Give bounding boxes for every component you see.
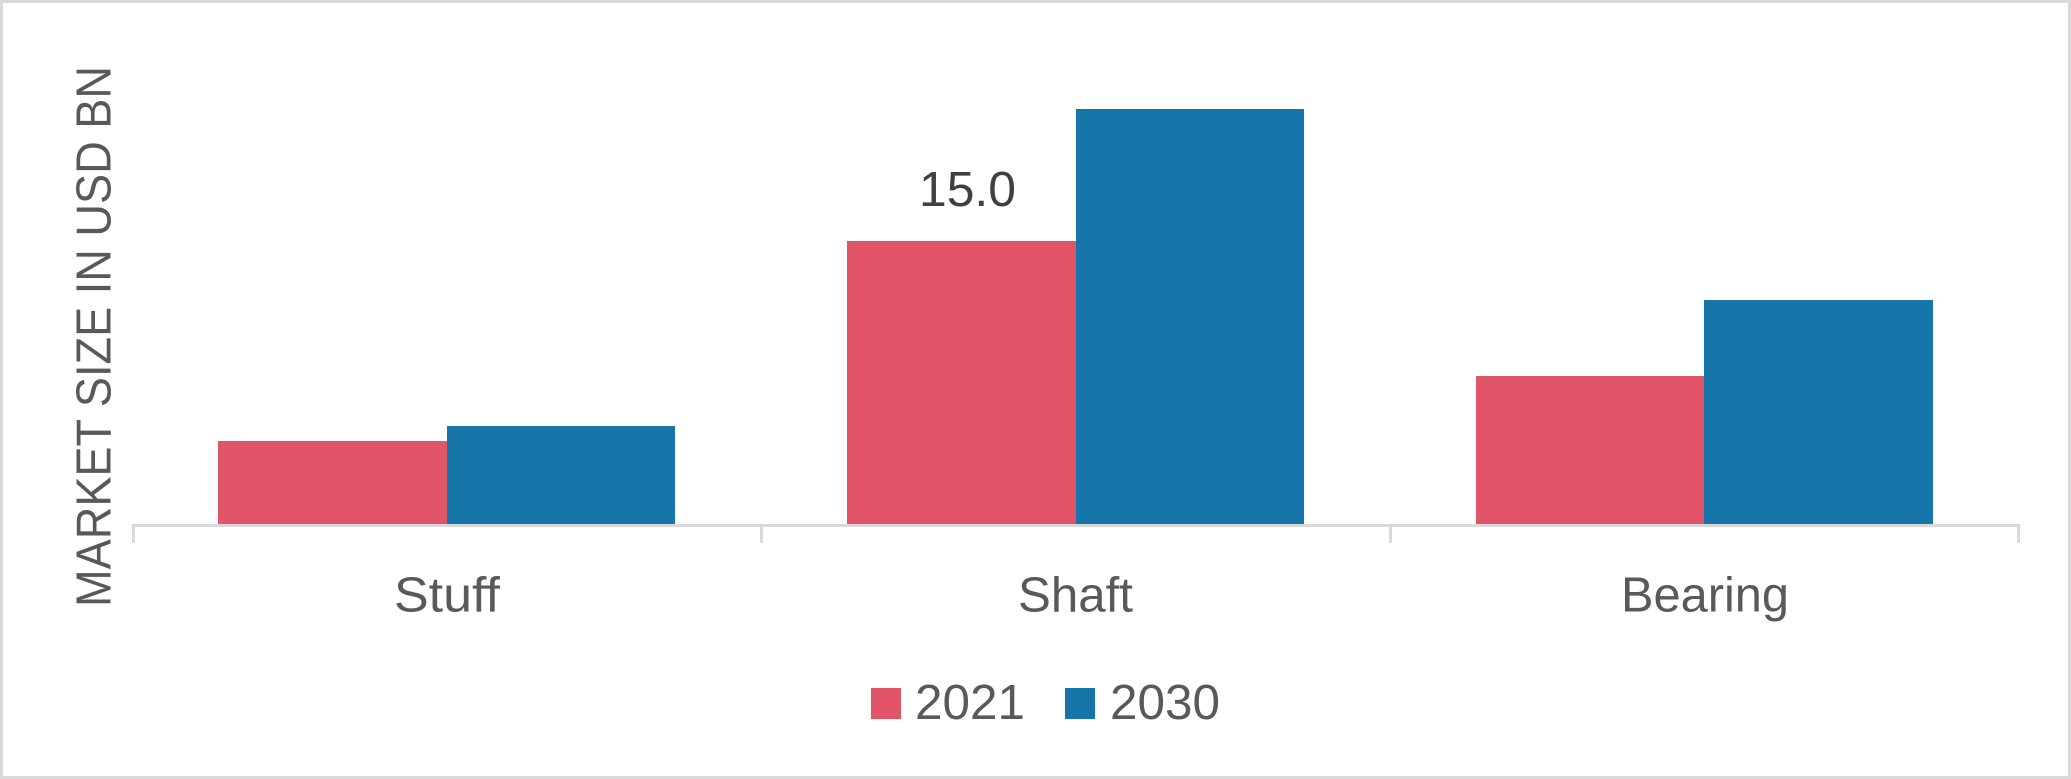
category label: Stuff: Stuff — [394, 568, 500, 622]
category label: Shaft: Shaft — [1018, 568, 1133, 622]
y axis title: MARKET SIZE IN USD BN — [68, 66, 122, 607]
x axis — [132, 524, 2020, 543]
category label: Bearing: Bearing — [1621, 568, 1789, 622]
bar group: Stuff — [218, 426, 675, 524]
bar group: Shaft — [847, 109, 1304, 524]
bar group: Bearing — [1476, 300, 1933, 524]
data label: 15.0: 15.0 — [919, 163, 1016, 217]
legend item: 2021: 2021 — [915, 676, 1025, 730]
legend item: 2030: 2030 — [1110, 676, 1220, 730]
legend — [871, 676, 1220, 730]
